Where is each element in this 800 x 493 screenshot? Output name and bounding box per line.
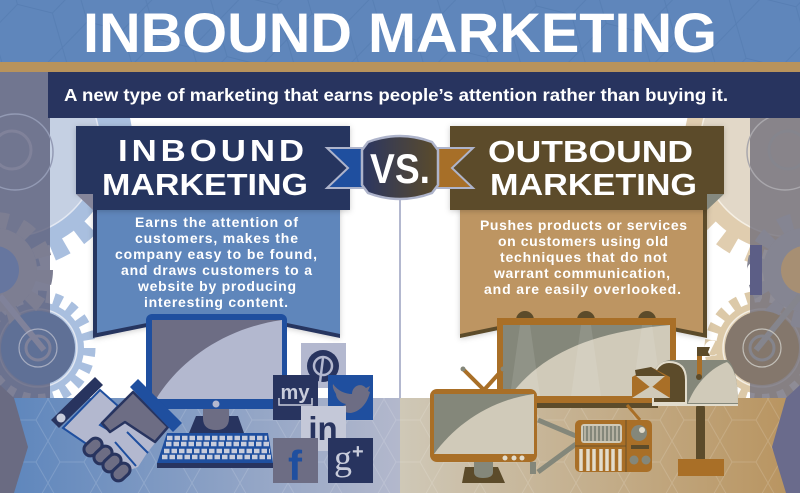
outbound description text: warrant communication, [493, 265, 670, 281]
panel: inbound heading [76, 126, 350, 210]
outbound description text: techniques that do not [500, 249, 667, 265]
inbound description text [115, 214, 317, 310]
vs ribbon: inbound [327, 148, 372, 188]
icon: computer monitor [146, 314, 287, 433]
vs ribbon: outbound [428, 148, 473, 188]
panel: outbound description [460, 205, 707, 338]
inbound description text: website by producing [137, 278, 296, 294]
inbound description text: company easy to be found, [115, 246, 317, 262]
icon: google plus tile: g [334, 438, 352, 478]
outbound description text: on customers using old [498, 233, 668, 249]
center divider [399, 200, 401, 398]
heading fold: outbound [707, 194, 724, 210]
icon: pinterest tile [301, 343, 346, 388]
icon: linkedin tile [301, 406, 346, 451]
left gears [0, 29, 124, 398]
icon: facebook tile [273, 438, 318, 489]
icon: billboard [497, 311, 676, 474]
icon: linkedin tile: in [308, 410, 338, 447]
panel: outbound heading [450, 126, 724, 210]
left translucent gear strip [0, 72, 75, 398]
heading fold: inbound [76, 194, 93, 210]
inbound description text: customers, makes the [135, 230, 298, 246]
vs badge: VS. [370, 145, 430, 192]
panel: inbound heading: INBOUND [118, 133, 308, 168]
right translucent gear strip [725, 114, 800, 398]
outbound description text: Pushes products or services [480, 217, 687, 233]
icon: twitter tile [328, 375, 373, 420]
outbound description text: and are easily overlooked. [484, 281, 681, 297]
icon: google plus tile [328, 438, 373, 483]
panel: outbound heading: MARKETING [490, 167, 697, 202]
inbound description text: interesting content. [144, 294, 288, 310]
panel: inbound description [93, 205, 340, 338]
inbound description text: and draws customers to a [121, 262, 312, 278]
floor: outbound side [400, 398, 800, 493]
header band [0, 0, 800, 72]
left floor arrow [0, 385, 28, 493]
icon: facebook tile: f [288, 442, 303, 489]
icon: myspace tile: my [281, 382, 310, 404]
floor: inbound side [0, 398, 400, 493]
vs badge [362, 136, 438, 199]
icon: myspace tile [273, 375, 318, 420]
right floor arrow [772, 385, 800, 493]
title: INBOUND MARKETING [83, 1, 717, 64]
subtitle banner [48, 72, 800, 118]
panel: outbound heading: OUTBOUND [488, 134, 693, 169]
icon: google plus tile: + [352, 441, 364, 463]
inbound description text: Earns the attention of [135, 214, 298, 230]
subtitle banner: A new type of marketing that earns people’s attention rather than buying it. [64, 85, 728, 105]
icon: keyboard [157, 433, 273, 468]
panel: inbound heading: MARKETING [102, 167, 308, 202]
icon: handshake [51, 377, 182, 484]
outbound description text [480, 217, 687, 297]
icon: mailbox [632, 347, 738, 476]
icon: radio [575, 405, 652, 472]
icon: television [430, 366, 537, 483]
right gears [676, 29, 800, 398]
